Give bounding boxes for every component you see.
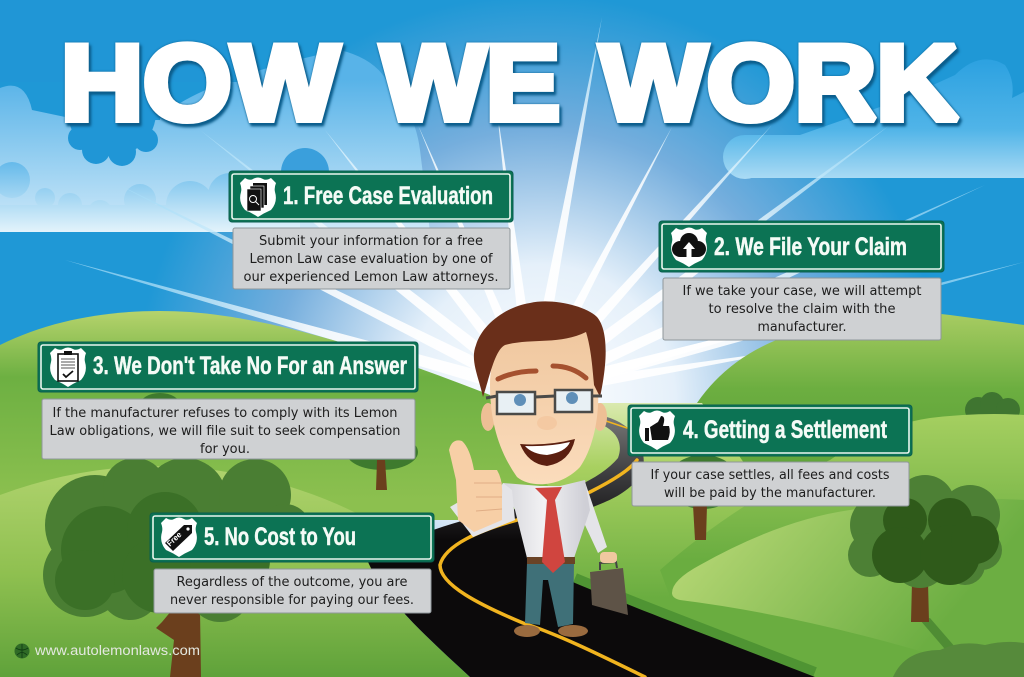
step 5 [150,513,434,613]
text box: step 5 [154,569,431,613]
tie [535,487,565,573]
title: HOW [61,22,339,142]
sign: no cost to you [150,513,434,562]
belt [527,557,575,564]
road [368,416,815,677]
sign: free case evaluation [229,171,513,222]
text box: step 1: Lemon Law case evaluation by one of [250,252,493,267]
bush: bottom right [893,642,1024,677]
sign: we file your claim [659,221,944,272]
small tree: behind sign 4 [667,455,739,540]
sign: we don't take no: 3. We Don't Take No For an Answer [93,352,407,380]
clouds: left lower band [0,162,300,232]
text box: step 2: manufacturer. [758,320,846,335]
text box: step 2: to resolve the claim with the [708,302,896,317]
hills: right middle [660,414,1024,677]
text box: step 4: If your case settles, all fees and costs [650,468,890,483]
trousers [525,563,574,627]
icon: clipboard [50,348,86,387]
text box: step 1: Submit your information for a free [259,234,483,249]
step 1 [229,171,513,289]
clouds: left upper [0,0,430,232]
sun rays [65,17,1024,399]
character: businessman [449,301,628,637]
shirt [503,480,590,558]
hills: right back [600,312,1024,677]
text box: step 2: If we take your case, we will attempt [682,284,922,299]
clouds: right [723,59,1024,179]
sign: free case evaluation: 1. Free Case Evaluation [283,182,493,210]
text box: step 3: Law obligations, we will file suit to seek compensation [50,424,400,439]
title [61,22,958,142]
icon: globe [14,644,30,658]
shoes [514,625,588,637]
text box: step 4 [632,462,909,506]
icon: free tag [161,518,197,557]
nose [537,416,557,430]
text box: step 4: will be paid by the manufacturer. [664,486,876,501]
text box: step 3: If the manufacturer refuses to comply with its Lemon [52,406,398,421]
hills: centre valley [480,403,770,677]
mouth [520,439,575,466]
hills: left front [0,466,470,677]
sign: no cost to you: 5. No Cost to You [204,523,356,551]
hair [474,301,606,397]
title: WORK [600,22,958,142]
raised fist [449,440,502,532]
icon: free tag: Free [165,530,184,548]
small tree: behind box 3 [140,393,418,490]
sign: we file your claim: 2. We File Your Claim [714,233,907,261]
text box: step 1 [233,228,510,289]
title: WE [381,22,560,142]
text box: step 5: Regardless of the outcome, you are [176,575,408,590]
step 2 [659,221,944,340]
text box: step 3: for you. [200,442,250,457]
large tree: right [848,475,1002,655]
hills: right front [672,499,1024,677]
icon: cloud upload [671,228,707,267]
briefcase [590,552,628,615]
hills: left back [0,311,570,520]
sign: getting a settlement [628,405,912,456]
glasses [486,390,602,414]
right arm [578,482,607,553]
bush: right horizon [965,392,1020,423]
text box: step 5: never responsible for paying our fees. [170,593,414,608]
sign: getting a settlement: 4. Getting a Settlement [683,416,888,444]
left sleeve [450,483,515,537]
sign: we don't take no [38,342,418,392]
large tree: left [43,458,311,677]
grass verge along road [575,578,815,672]
step 4 [628,405,912,506]
text box: step 1: our experienced Lemon Law attorneys. [244,270,498,285]
step 3 [38,342,418,459]
icon: thumbs up [639,410,675,450]
text box: step 2 [663,278,941,340]
icon: documents with magnifier [240,178,276,217]
eyebrows [498,366,586,379]
face [490,332,598,484]
ears [481,403,607,431]
footer website: www.autolemonlaws.com [34,643,200,658]
road centre line [440,420,645,677]
text box: step 3 [42,399,415,459]
